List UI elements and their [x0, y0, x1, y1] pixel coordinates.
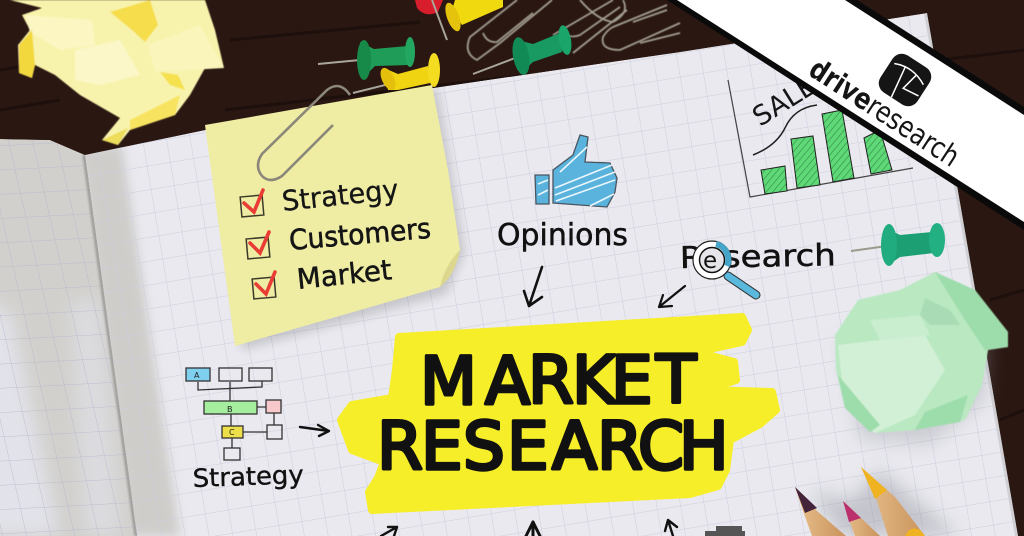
checklist item: Strategy: Strategy: [280, 173, 400, 218]
title: market research: RESEARCH: [377, 408, 729, 485]
checklist item: Market: [252, 253, 393, 299]
crumpled yellow paper: [10, 0, 224, 145]
checklist item: Customers: Customers: [288, 212, 432, 257]
arrow: opinions to title: [524, 267, 542, 306]
banner: [667, 0, 1024, 230]
push pin: green top: [473, 24, 574, 76]
label: Strategy: Strategy: [192, 460, 304, 493]
arrow: strategy to title: [300, 425, 329, 436]
arrow: research to title: [659, 286, 685, 307]
paper clip on note: [258, 86, 350, 180]
label: Research: Research: [680, 238, 836, 276]
title: market research: [377, 341, 729, 485]
shadow of green paper: [840, 340, 990, 445]
crumpled green paper: [835, 272, 1008, 433]
strategy flowchart: A: [194, 371, 200, 380]
partial arrows at bottom: [381, 520, 677, 536]
notebook left page: [0, 139, 137, 536]
push pin: yellow top: [442, 0, 503, 33]
sales chart: [728, 61, 913, 197]
brand wordmark: driveresearch: [803, 51, 966, 174]
pencils: [795, 467, 925, 536]
icon: thumbs up: [535, 135, 617, 207]
yellow highlighter block: [341, 317, 776, 510]
paper clips on desk: [468, 0, 680, 60]
icon: magnifier: e: [703, 248, 717, 274]
sales chart: SALES: [747, 61, 836, 133]
push pin: green right: [851, 223, 945, 266]
sticky note: [205, 85, 465, 350]
push pin: yellow middle: [353, 53, 440, 93]
push pin: red: [415, 0, 447, 40]
title: market research: MARKET: [420, 341, 697, 420]
icon: briefcase partial: [705, 526, 745, 536]
shadows of pencils: [810, 470, 960, 536]
label: Opinions: Opinions: [497, 218, 628, 253]
strategy flowchart: C: [229, 428, 235, 437]
strategy flowchart: B: [227, 405, 232, 414]
strategy flowchart: [186, 368, 282, 460]
checklist item: Market: Market: [295, 253, 393, 296]
push pin: green left: [318, 37, 415, 80]
icon: magnifier: [693, 241, 756, 295]
icon: drive research logo: [875, 50, 935, 110]
